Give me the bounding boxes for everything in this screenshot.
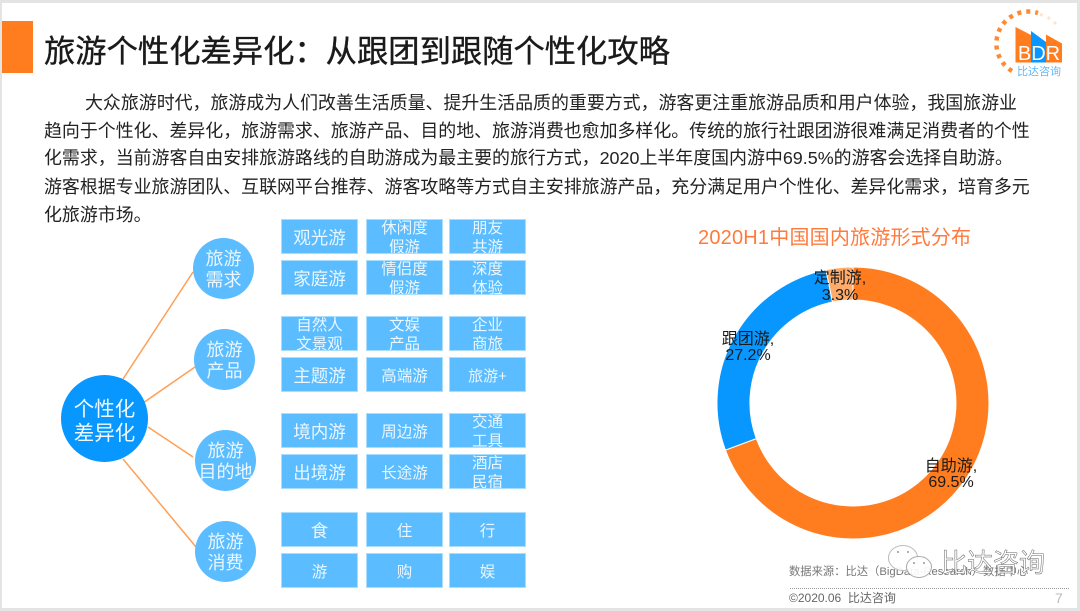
node: 旅游需求: 需求 — [206, 270, 242, 290]
node: 旅游消费: 旅游 — [208, 532, 244, 552]
text: 深度 — [472, 261, 503, 278]
text: 住 — [397, 522, 412, 540]
body paragraph: 趋向于个性化、差异化，旅游需求、旅游产品、目的地、旅游消费也愈加多样化。传统的旅行社跟团游很难满足消费者的个性 — [44, 121, 1030, 141]
watermark: 比达咨询 — [941, 548, 1045, 578]
icon: BDR logo: BDR — [1018, 43, 1060, 65]
label: 69.5%: 69.5% — [928, 474, 974, 491]
text: 主题游 — [293, 366, 346, 386]
tag group: 旅游产品 — [281, 316, 526, 392]
text: 自然人 — [296, 317, 343, 334]
text: 长途游 — [381, 464, 428, 482]
title: 旅游个性化差异化：从跟团到跟随个性化攻略 — [44, 34, 670, 69]
tag group: 旅游目的地 — [281, 413, 526, 489]
label: 跟团游: 跟团游, — [722, 330, 774, 348]
text: 观光游 — [293, 228, 346, 248]
central node: 个性化差异化 — [61, 375, 148, 462]
text: 境内游 — [293, 422, 346, 442]
node: 旅游目的地 — [195, 430, 256, 491]
chart title: 2020H1中国国内旅游形式分布 — [698, 227, 971, 249]
connector lines — [122, 272, 196, 548]
data source note: 数据来源：比达（BigData-Research）数据中心 — [789, 566, 1028, 578]
text: 旅游+ — [468, 368, 507, 384]
footer divider — [790, 588, 1069, 589]
central node: 个性化差异化: 个性化 — [74, 398, 135, 420]
icon: BDR logo — [994, 9, 1062, 78]
segment: 跟团游 27.2% — [717, 270, 832, 450]
text: 家庭游 — [293, 268, 346, 288]
node: 旅游产品: 产品 — [206, 361, 242, 381]
text: 情侣度 — [381, 261, 428, 278]
central node: 个性化差异化: 差异化 — [74, 422, 135, 444]
node: 旅游需求: 旅游 — [206, 249, 242, 269]
segment: 定制游 3.3% — [826, 267, 853, 302]
text: 文娱 — [389, 317, 420, 334]
node: 旅游产品 — [194, 329, 255, 390]
orange title marker — [2, 21, 33, 73]
body paragraph: 化需求，当前游客自由安排旅游路线的自助游成为最主要的旅行方式，2020上半年度国内游中69.5%的游客会选择自助游。 — [44, 148, 1013, 168]
segment: 自助游 69.5% — [725, 267, 989, 539]
body paragraph — [44, 93, 1030, 225]
label: 27.2%: 27.2% — [725, 347, 771, 364]
text: 出境游 — [293, 462, 346, 482]
copyright: ©2020.06 比达咨询 — [789, 591, 896, 605]
text: 交通 — [472, 414, 503, 431]
text: 酒店 — [472, 455, 503, 472]
label: 3.3%: 3.3% — [822, 287, 858, 304]
text: 高端游 — [381, 368, 428, 384]
text: 购 — [397, 564, 412, 580]
text: 朋友 — [472, 220, 503, 237]
node: 旅游消费: 消费 — [208, 553, 244, 573]
icon: BDR logo: 比达咨询 — [1017, 64, 1061, 78]
donut chart — [717, 268, 988, 538]
text: 周边游 — [381, 424, 428, 440]
text: 游 — [312, 564, 327, 580]
tag group: 旅游需求 — [281, 219, 526, 295]
text: 行 — [480, 522, 495, 540]
node: 旅游产品: 旅游 — [206, 340, 242, 360]
body paragraph: 化旅游市场。 — [44, 205, 152, 225]
text: 娱 — [480, 564, 495, 580]
label: 定制游: 定制游, — [814, 269, 866, 287]
node: 旅游目的地: 目的地 — [198, 462, 252, 482]
label: 自助游: 自助游, — [925, 457, 977, 475]
node: 旅游消费 — [195, 521, 256, 582]
text: 企业 — [472, 317, 503, 334]
node: 旅游目的地: 旅游 — [208, 441, 244, 461]
tag group: 旅游消费 — [281, 512, 526, 588]
node: 旅游需求 — [193, 238, 254, 299]
body paragraph: 游客根据专业旅游团队、互联网平台推荐、游客攻略等方式自主安排旅游产品，充分满足用户个性化、差异化需求，培育多元 — [44, 177, 1030, 197]
watermark — [888, 545, 1045, 578]
text: 休闲度 — [381, 220, 428, 237]
text: 食 — [311, 520, 328, 540]
page number: 7 — [1055, 590, 1063, 606]
body paragraph: 大众旅游时代，旅游成为人们改善生活质量、提升生活品质的重要方式，游客更注重旅游品质和用户体验，我国旅游业 — [85, 93, 1017, 113]
